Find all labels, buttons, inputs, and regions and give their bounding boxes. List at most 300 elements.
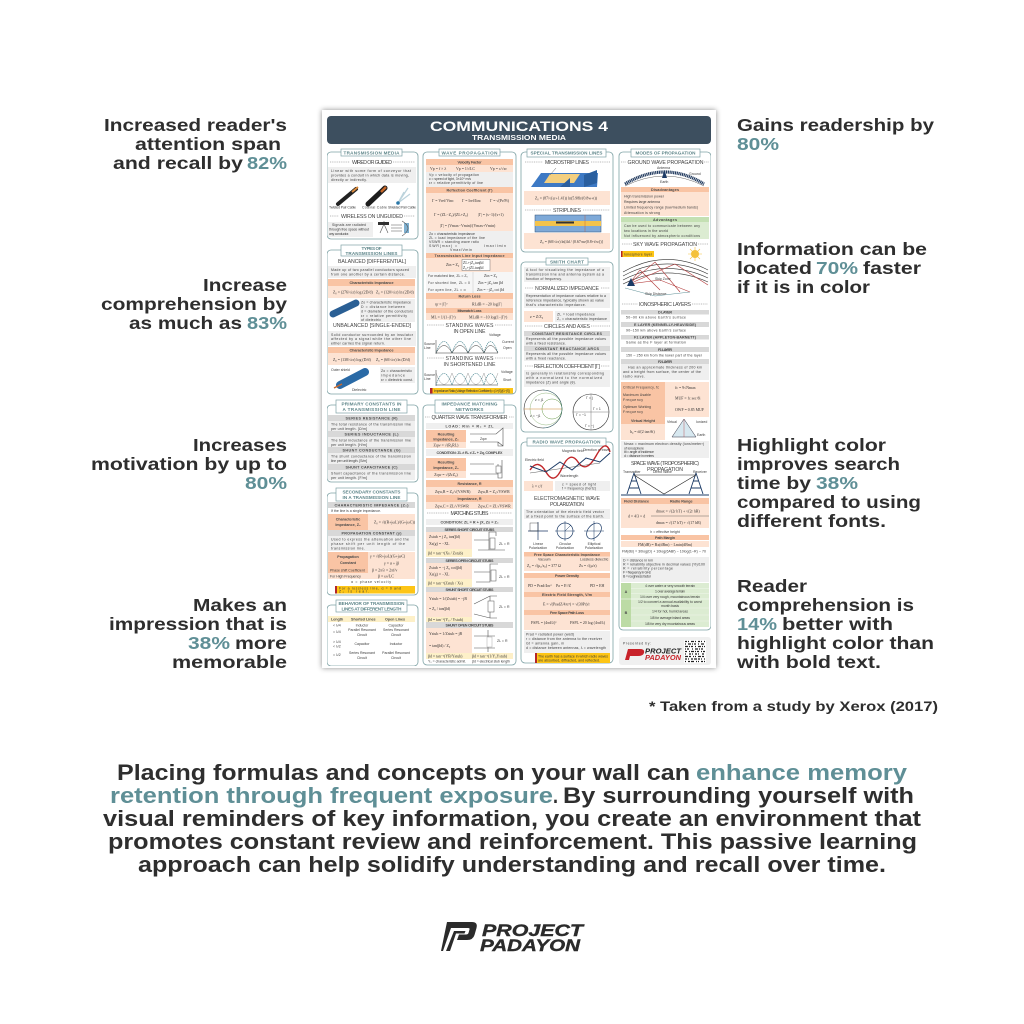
panel: modes of propagation: PROPAGATION (647, 467, 683, 473)
icon: quarter wave circuit 2 (470, 460, 502, 478)
left stat: attention span and recall: Increased reader's (104, 115, 287, 135)
icon: shunt open stub (474, 630, 495, 652)
panel: secondary constants: transmission line. (331, 546, 365, 550)
chart: standing waves in open line: Line (424, 346, 431, 350)
icon: series open stub (474, 564, 498, 582)
panel: primary constants: The total resistance of the transmission line (331, 422, 411, 426)
panel: modes of propagation: Not influenced by atmospheric conditions (624, 234, 700, 238)
panel: modes of propagation: Requires large antenna (624, 200, 660, 204)
panel: impedance matching networks: Zstub = j Z₀ tan(βd) (429, 535, 461, 539)
panel: secondary constants: α = phase velocity (351, 580, 391, 584)
chart: smith reflection circle: Γ = −j (585, 424, 594, 428)
callout: ionosphere label (621, 251, 654, 257)
panel: primary constants: per unit length. [F/m] (331, 476, 367, 480)
panel: modes of propagation: Attenuation is strong (624, 211, 660, 215)
panel: secondary constants: phase shift per unit length of the (331, 542, 405, 546)
panel: behavior of transmission lines: < λ/4 (333, 624, 341, 628)
poster content (327, 116, 711, 666)
panel: behavior of transmission lines: Inductor (356, 624, 369, 628)
right stat: information in color (737, 239, 927, 297)
icon: space wave towers (621, 470, 709, 495)
chart: sky wave paths (623, 259, 708, 296)
panel: wave propagation: Vp = f × λ (430, 167, 446, 171)
source note: * Taken from a study by Xerox (2017) (649, 698, 938, 714)
logo: Project Padayon: PROJECT (482, 921, 585, 940)
left stat: comprehension: comprehension by (101, 294, 287, 314)
panel: behavior of transmission lines: Length (331, 618, 344, 622)
closing paragraph: visual reminders of key information, you create an environment that (103, 806, 922, 831)
closing paragraph: Placing formulas and concepts on your wall can (117, 760, 690, 785)
panel: smith chart: ZL = load impedance (557, 312, 595, 316)
panel: behavior of transmission lines: Capacitor (355, 642, 370, 646)
panel: types of transmission lines: impedance (381, 374, 405, 378)
panel: presented by: Presented by: (623, 642, 651, 646)
panel: radio wave propagation: The orientation of the electric field vector (526, 510, 605, 514)
panel: impedance matching networks: ZL = R (499, 605, 510, 609)
icon: logo mark (441, 922, 477, 951)
panel: types of transmission lines: Zo = characteristic impedance (361, 300, 411, 304)
panel: modes of propagation: Has an approximate thickness of 200 km (628, 366, 702, 370)
panel: types of transmission lines: Z₀ = (276/√εr) log (2D/d) (333, 290, 373, 294)
panel: modes of propagation: High transmission power (624, 194, 665, 198)
panel: behavior of transmission lines: Circuit (357, 656, 367, 660)
panel: modes of propagation (619, 149, 711, 630)
panel: wave propagation: Vmax/Vmin (450, 248, 472, 252)
panel: modes of propagation: Disadvantages (651, 188, 679, 192)
panel: behavior of transmission lines: Shorted Lines (351, 618, 376, 622)
panel: types of transmission lines: from one another by a certain distance. (331, 272, 405, 276)
panel: modes of propagation: F1 LAYER (APPLETON-BARNETT) (634, 336, 697, 340)
panel: radio wave propagation: Elliptical (588, 542, 601, 546)
right stat: highlight color search time: compared to using (737, 492, 921, 512)
panel: wave propagation: ZL = load impedance of the line (429, 236, 485, 240)
panel: types of transmission lines (327, 245, 418, 394)
panel: modes of propagation: GROUND WAVE PROPAGATION (628, 160, 704, 166)
panel: modes of propagation: 4 over water or very smooth terrain (645, 584, 695, 588)
panel: modes of propagation: Same as the F layer at formation (626, 340, 686, 344)
panel: impedance matching networks: βd = tan⁻¹(1/Y₀Ystub) (472, 654, 508, 658)
panel: transmission media: through free space without (329, 228, 369, 232)
panel: behavior of transmission lines: = λ/4 (333, 630, 341, 634)
chart: smith reflection circle: Γ = −1 (576, 413, 586, 417)
icon: virtual height triangle: Earth (697, 433, 705, 437)
panel: transmission media: Twisted Pair Cable (329, 206, 356, 210)
panel: impedance matching networks: Xs(g) = −XL (429, 542, 450, 546)
panel: wave propagation: WAVE PROPAGATION (442, 150, 498, 155)
icon: space wave towers: Direct Wave (653, 470, 672, 474)
icon: ground wave arc: Antenna (657, 166, 670, 170)
panel: wave propagation: Zin = jZ₀ tan βd (478, 281, 503, 285)
panel: primary constants (327, 400, 418, 482)
panel: presented by (619, 637, 711, 665)
panel: modes of propagation: 150 – 250 km from the lower part of the layer (626, 354, 703, 358)
panel: types of transmission lines: UNBALANCED [SINGLE-ENDED] (333, 323, 412, 329)
panel: behavior of transmission lines (327, 600, 418, 666)
panel: modes of propagation: d = 4/3 × d (628, 514, 645, 518)
callout: radio note: are absorbed, diffracted, and reflected. (538, 658, 600, 662)
panel: smith chart: CIRCLES AND AXES (544, 324, 591, 330)
panel: wave propagation: Imax/Imin (484, 244, 506, 248)
chart: smith reflection circle: Γ = j (586, 396, 593, 400)
right stat: readership: 80% (737, 134, 780, 154)
chart: electromagnetic wave: Magnetic field (562, 449, 584, 453)
poster header: TRANSMISSION MEDIA (472, 135, 566, 142)
panel: presented by: PADAYON (645, 655, 682, 662)
panel: wave propagation: Vp = velocity of propagation (429, 173, 479, 177)
panel: behavior of transmission lines: BEHAVIOR OF TRANSMISSION (338, 601, 405, 606)
icon: coaxial cable (331, 368, 367, 392)
panel: smith chart: A tool for visualizing the impedance of a (526, 268, 604, 272)
poster: Communications 4 (322, 110, 716, 668)
panel: modes of propagation: R = reliability objective in decimal values (%)/100 (623, 562, 705, 566)
panel: impedance matching networks: Resulting (438, 432, 454, 436)
icon: stripline cross-section (535, 215, 601, 232)
right stat: reader comprehension: better with (782, 614, 893, 634)
panel: modes of propagation: Limited frequency range (low/medium bands) (624, 206, 698, 210)
panel: modes of propagation: dmax = √(17 hT) + √(17 hR) (656, 520, 702, 525)
panel: modes of propagation: MODES OF PROPAGATION (636, 151, 696, 156)
panel: radio wave propagation: Free Space Characteristic Impedance (534, 553, 600, 557)
panel: radio wave propagation: PD = EH (590, 584, 604, 588)
callout: reflection note (430, 388, 513, 394)
logo: Project Padayon (441, 921, 585, 955)
panel: impedance matching networks: CONDITION: ZL ≠ R₀ ≠ Z₀ + Zq, COMPLEX (436, 451, 503, 455)
panel: types of transmission lines: of dielectric (361, 318, 381, 322)
panel: impedance matching networks: ZL = R (497, 639, 508, 643)
panel: secondary constants: For High Frequency (330, 574, 361, 578)
panel: modes of propagation: 1/4 over very rough, mountainous terrain (640, 595, 700, 599)
panel: impedance matching networks: Zstub = −j Z₀ cot(βd) (429, 566, 463, 570)
icon: virtual height triangle: Virtual (667, 420, 677, 424)
panel: modes of propagation: Path Margin (655, 536, 676, 540)
panel: secondary constants: For a lossless line, α = 0 and (339, 586, 401, 590)
panel: radio wave propagation: Electric Field Strength, V/m (542, 593, 593, 597)
panel: modes of propagation: 1 over average terrain (655, 590, 685, 594)
panel: wave propagation (423, 149, 516, 394)
panel: secondary constants: SECONDARY CONSTANTS (342, 490, 400, 494)
panel: impedance matching networks: Zqw,C = ZL/√VSWR (435, 504, 469, 510)
poster header (327, 116, 711, 144)
panel: impedance matching networks: βd = tan⁻¹(Yₛ / Ystub) (428, 618, 464, 622)
panel: secondary constants: β = ω√LC (378, 574, 394, 578)
panel: impedance matching networks: Ystub = 1/Zstub = jB (429, 632, 463, 636)
panel: wave propagation: c = speed of light, 3×10⁸ m/s (429, 177, 471, 181)
panel: types of transmission lines: d = diameter of the conductors (361, 310, 413, 314)
panel: modes of propagation: R = reliability percentage (623, 566, 673, 570)
icon: space wave towers: Transmitter (623, 470, 641, 474)
closing paragraph: By surrounding yourself with (563, 783, 914, 808)
panel: behavior of transmission lines: Capacitor (389, 624, 404, 628)
icon: sun (688, 247, 702, 261)
panel: smith chart: impedance (Z) and angle (θ). (526, 380, 576, 384)
right stat: readership (737, 115, 934, 154)
panel: modes of propagation: fc = 9√Nmax (675, 385, 696, 390)
panel: behavior of transmission lines: Series Resonant (349, 651, 375, 655)
panel: impedance matching networks: SERIES OPEN CIRCUIT STUBS (446, 559, 494, 563)
panel: impedance matching networks: Impedance, R (458, 497, 482, 501)
panel: impedance matching networks: Resulting (438, 460, 454, 464)
panel: smith chart: Representation of impedance values relative to a (526, 294, 606, 298)
closing paragraph: promotes constant review and reinforcement. This passive learning (108, 829, 917, 854)
panel: primary constants: A TRANSMISSION LINE (342, 407, 400, 412)
panel: modes of propagation: 50–90 km above Earth's surface (626, 316, 686, 320)
chart: smith reflection circle: Γ = 1 (593, 407, 601, 411)
panel: modes of propagation: OWF = 0.85 MUF (675, 408, 705, 412)
panel: wave propagation: Zin = Z₀ (484, 274, 498, 278)
panel: behavior of transmission lines: LINES AT DIFFERENT LENGTH (342, 606, 402, 611)
left stat: memorable impression: 38% (188, 633, 231, 653)
panel: radio wave propagation: Linear (533, 542, 544, 546)
panel: impedance matching networks: βd = tan⁻¹(Xs / Zstub) (428, 552, 464, 556)
chart: electromagnetic wave: Wavelength (560, 474, 578, 478)
panel: behavior of transmission lines: Series Resonant (383, 628, 409, 632)
panel: impedance matching networks: SHUNT OPEN CIRCUIT STUBS (446, 624, 494, 628)
panel: wave propagation: Velocity Factor (458, 160, 482, 164)
panel: transmission media: directly or indirectly. (331, 178, 367, 182)
panel: wave propagation: ML = 1/(1−|Γ|²) (431, 315, 456, 319)
icon: coaxial cable: Outer shield (331, 368, 350, 372)
panel: impedance matching networks (423, 400, 516, 665)
panel: modes of propagation: D LAYER (658, 311, 672, 315)
panel: secondary constants: Propagation (337, 555, 360, 559)
right stat: highlight color search time: Highlight color (737, 435, 886, 455)
panel: secondary constants: Constant (340, 561, 357, 565)
right stat: reader comprehension: Reader (737, 576, 807, 596)
icon: ground wave arc (625, 166, 704, 186)
right stat: highlight color search time (737, 435, 921, 531)
icon: shunt short stub (474, 596, 497, 618)
panel: wave propagation: IN OPEN LINE (454, 329, 486, 335)
panel: special transmission lines: MICROSTRIP LINES (545, 160, 590, 166)
panel: modes of propagation: SKY WAVE PROPAGATION (633, 242, 697, 248)
panel: types of transmission lines: Characteristic Impedance (350, 348, 394, 352)
icon: qr code (684, 640, 706, 663)
panel: wave propagation: |Γ| = (Vmax−Vmin)/(Vmax+Vmin) (440, 224, 496, 228)
panel: modes of propagation: FM(dB) = Rx(dBm) − Lmin(dBm) (638, 543, 693, 547)
panel: modes of propagation: F = frequency in GHz (623, 570, 651, 574)
panel: wave propagation: Vp = c/√εr (490, 166, 507, 171)
icon: space wave towers: Receiver (693, 470, 708, 474)
panel: impedance matching networks: IMPEDANCE MATCHING (442, 402, 498, 406)
panel: impedance matching networks: Ystub = 1/(Zstub) = −jB (429, 597, 467, 601)
panel: primary constants: Shunt capacitance of the transmission line (331, 472, 411, 476)
icon: ground wave arc: Ground (689, 172, 701, 176)
panel: modes of propagation: Critical Frequency, fc (623, 386, 659, 390)
panel: special transmission lines: Z₀ = (87/√(εr+1.41)) ln(5.98h/(0.8w+t)) (535, 196, 598, 200)
left stat: motivation: 80% (245, 473, 288, 493)
panel: modes of propagation: B = roughness factor (623, 574, 652, 578)
panel: impedance matching networks: Zqw,R = Z₀√VSWR (478, 489, 510, 495)
panel: wave propagation: For shorted line, ZL = 0 (428, 281, 470, 285)
panel: secondary constants (327, 488, 418, 595)
panel: transmission media: Linear with some form of conveyor that (331, 169, 411, 173)
panel: wave propagation: MLdB = −10 log(1−|Γ|²) (469, 315, 508, 319)
panel: radio wave propagation: Lossless dielectric (580, 558, 609, 562)
panel: transmission media: Shielded Pair Cable (388, 206, 416, 210)
poster sheet (322, 110, 716, 668)
panel: smith chart: with a fixed resistance. (526, 342, 566, 346)
panel: secondary constants: Phase shift Coefficient (330, 568, 365, 572)
panel: impedance matching networks: Y₀ = characteristic admit. (428, 660, 466, 664)
panel: radio wave propagation: Zs = √(μ/ε) (579, 563, 597, 568)
panel: behavior of transmission lines: < λ/2 (333, 644, 341, 648)
panel: modes of propagation: Optimum Working (623, 405, 651, 409)
panel: smith chart: Represents all the possible impedance values (526, 337, 606, 341)
callout: radio note: The earth has a surface in which radio waves (538, 654, 608, 658)
closing paragraph: retention through frequent exposure (110, 783, 553, 808)
panel: wave propagation: STANDING WAVES (446, 323, 494, 329)
panel: secondary constants: Z₀ = √((R+jωL)/(G+jωC)) (374, 520, 416, 524)
panel: primary constants: SERIES INDUCTANCE (L) (344, 433, 399, 437)
panel: secondary constants: If the line is a single impedance. (331, 509, 381, 513)
panel: radio wave propagation: Power Density (555, 574, 580, 578)
panel: modes of propagation: F2 LAYER (658, 360, 672, 364)
right stat: highlight color search time: 38% (816, 473, 859, 493)
panel: types of transmission lines: TRANSMISSION LINES (346, 251, 398, 256)
panel: presented by: PROJECT (645, 648, 682, 656)
chart: standing waves in shortened line: Source (424, 373, 435, 377)
closing paragraph: . (553, 783, 558, 808)
panel: modes of propagation: month basis (661, 604, 679, 608)
panel: transmission media: WIRED OR GUIDED (352, 160, 392, 166)
left stat: comprehension: 83% (247, 313, 287, 333)
panel: behavior of transmission lines: Parallel Resonant (348, 628, 376, 632)
chart: standing waves in open line: Current (502, 340, 514, 344)
panel: smith chart: z = Z/Z₀ (530, 315, 544, 319)
panel: secondary constants: CHARACTERISTIC IMPEDANCE (Z₀) (334, 504, 409, 508)
chart: smith reflection circle (573, 394, 609, 430)
panel: wave propagation: Γ = Vref/Vinc (432, 199, 454, 203)
right stat: readership: Gains readership by (737, 115, 934, 135)
left stat: attention span and recall (104, 115, 287, 173)
panel: impedance matching networks: = Z₀ / tan(βd) (429, 607, 451, 611)
panel: impedance matching networks: Zqw = √(R₀RL) (434, 443, 459, 448)
icon: twin lead cable (333, 303, 356, 314)
panel: secondary constants: Characteristic (336, 518, 360, 522)
panel: radio wave propagation: ELECTROMAGNETIC WAVE (534, 496, 601, 502)
panel: modes of propagation: Field Distance (624, 500, 649, 504)
panel: behavior of transmission lines: Circuit (391, 656, 401, 660)
poster header: COMMUNICATIONS 4 (430, 118, 608, 134)
panel: modes of propagation: Frequency (623, 410, 643, 414)
panel: impedance matching networks: ZL = R (499, 542, 510, 546)
icon: microstrip block (531, 168, 598, 187)
right stat: information in color: 70% (816, 258, 859, 278)
panel: wave propagation: For open line, ZL = ∞ (428, 288, 466, 292)
chart: electromagnetic wave: Electric field (525, 458, 544, 462)
panel: modes of propagation: F1 LAYER (658, 348, 672, 352)
icon: virtual height triangle: Ionized (696, 420, 707, 424)
chart: smith impedance circle: z = −j1 (530, 414, 541, 418)
panel: modes of propagation: Can be used to communicate between any (624, 224, 700, 228)
panel: impedance matching networks: Impedance, Z₀ (433, 466, 459, 470)
panel: smith chart: CONSTANT RESISTANCE CIRCLES (532, 332, 603, 336)
panel: impedance matching networks: βd = electrical stub length (472, 660, 510, 664)
chart: sky wave paths: Skip Distance (645, 292, 666, 296)
panel: primary constants: SERIES RESISTANCE (R) (346, 417, 398, 421)
panel: impedance matching networks: Xs(g) = −XL (429, 572, 450, 576)
panel: special transmission lines: Z₀ = (60/√εr) ln[4d / (0.67πw(0.8+t/w))] (540, 239, 603, 244)
chart: standing waves in open line: Source (424, 342, 435, 346)
panel: impedance matching networks: Zqw,R = Z₀/√(VSWR) (435, 489, 471, 495)
left stat: attention span and recall: attention span (135, 134, 281, 154)
panel: modes of propagation: and a height from surface, the center of the (623, 370, 701, 374)
right stat: reader comprehension: comprehension is (737, 595, 914, 615)
panel: modes of propagation: θi = angle of incidence (624, 450, 654, 454)
panel: modes of propagation: Advantages (653, 218, 677, 222)
panel: types of transmission lines: Z₀ = (138/√εr) log (D/d) (333, 357, 371, 362)
panel: types of transmission lines: Zo = characteristic (381, 369, 412, 373)
panel: impedance matching networks: CONDITION: ZL = R + jX, Zs = Z₀ (440, 521, 499, 525)
icon: polarization types (528, 520, 604, 542)
left stat: motivation: motivation by up to (91, 454, 287, 474)
panel: wave propagation: Vp = 1/√LC (456, 166, 475, 171)
panel: wave propagation: εr = relative permittivity of line (429, 181, 483, 185)
panel: modes of propagation: 90–150 km above Earth's surface (626, 328, 686, 332)
left stat: memorable impression: impression that is (109, 614, 287, 634)
left stat: comprehension (101, 275, 287, 333)
panel: modes of propagation: h₀ = d/(2 tan θi) (630, 430, 655, 434)
icon: series short stub (474, 532, 505, 550)
panel: smith chart: REFLECTION COEFFICIENT [Γ] (534, 364, 601, 370)
panel: types of transmission lines: BALANCED [DIFFERENTIAL] (338, 259, 407, 265)
chart: standing waves in shortened line: Line (424, 377, 431, 381)
panel: wave propagation: ηr = |Γ|² (435, 302, 448, 306)
panel: impedance matching networks: MATCHING STUBS (450, 511, 489, 517)
panel: wave propagation: Return Loss (458, 295, 480, 299)
icon: radio antenna (378, 221, 409, 236)
panel: modes of propagation: Frequency (623, 398, 643, 402)
panel: impedance matching networks: Impedance, Z₀ (433, 438, 459, 442)
panel: impedance matching networks: ZL = R (499, 575, 510, 579)
panel: impedance matching networks: = tan(βd) / Z₀ (429, 644, 451, 648)
panel: behavior of transmission lines: Parallel Resonant (382, 651, 410, 655)
panel: modes of propagation: dmax = √(2r hT) + √(2r hR) (656, 508, 700, 514)
panel: transmission media: Signals are radiated (332, 223, 366, 227)
left stat: memorable impression: memorable (172, 652, 287, 672)
panel: smith chart: Is generally in relationship corresponding (526, 372, 604, 376)
right stat: information in color: faster (863, 258, 921, 278)
panel: wave propagation: Γ = (ZL−Z₀)/(ZL+Z₀) (434, 213, 469, 217)
panel: transmission media: TRANSMISSION MEDIA (344, 150, 400, 155)
chart: electromagnetic wave: Direction of travel (583, 448, 610, 452)
panel: smith chart: reference impedance, typically shown as value (526, 298, 604, 302)
panel: radio wave propagation: d = distance between antennas, λ = wavelength (526, 646, 606, 650)
panel: radio wave propagation: Pa = E²/Z (556, 584, 572, 588)
panel: radio wave propagation: f = frequency (hertz) (562, 486, 596, 490)
panel: modes of propagation: Radio Range (670, 500, 693, 504)
panel: modes of propagation: d = distance in meters (624, 454, 654, 458)
panel: modes of propagation: h = effective height (650, 530, 680, 534)
panel: impedance matching networks: Zqw,C = ZL√VSWR (478, 504, 511, 510)
panel: radio wave propagation: PD = Prad/4πr² (528, 584, 553, 588)
panel: types of transmission lines: Z₀ = (60/√εr) ln (D/d) (376, 357, 411, 362)
panel: wave propagation: For matched line, ZL = Z₀ (428, 274, 469, 278)
chart: standing waves in shortened line: Voltage (501, 370, 513, 374)
panel: transmission media: provides a conduit in which data is moving, (331, 174, 409, 178)
right stat: reader comprehension: 14% (737, 614, 777, 634)
chart: standing waves in open line: Voltage (489, 333, 501, 337)
panel: radio wave propagation: Gt = antenna gain, m (526, 642, 564, 646)
panel: modes of propagation: A (625, 590, 628, 594)
left stat: memorable impression: Makes an (193, 595, 287, 615)
panel: special transmission lines: SPECIAL TRANSMISSION LINES (530, 151, 602, 156)
panel: primary constants: per unit length. [H/m] (331, 443, 367, 447)
panel: radio wave propagation: c = speed of light (562, 482, 596, 486)
panel: types of transmission lines: Solid conductor surrounded by an insulator (331, 333, 414, 337)
right stat: reader comprehension: highlight color than (737, 633, 934, 653)
panel: types of transmission lines: εr = dielectric const. (381, 378, 413, 382)
